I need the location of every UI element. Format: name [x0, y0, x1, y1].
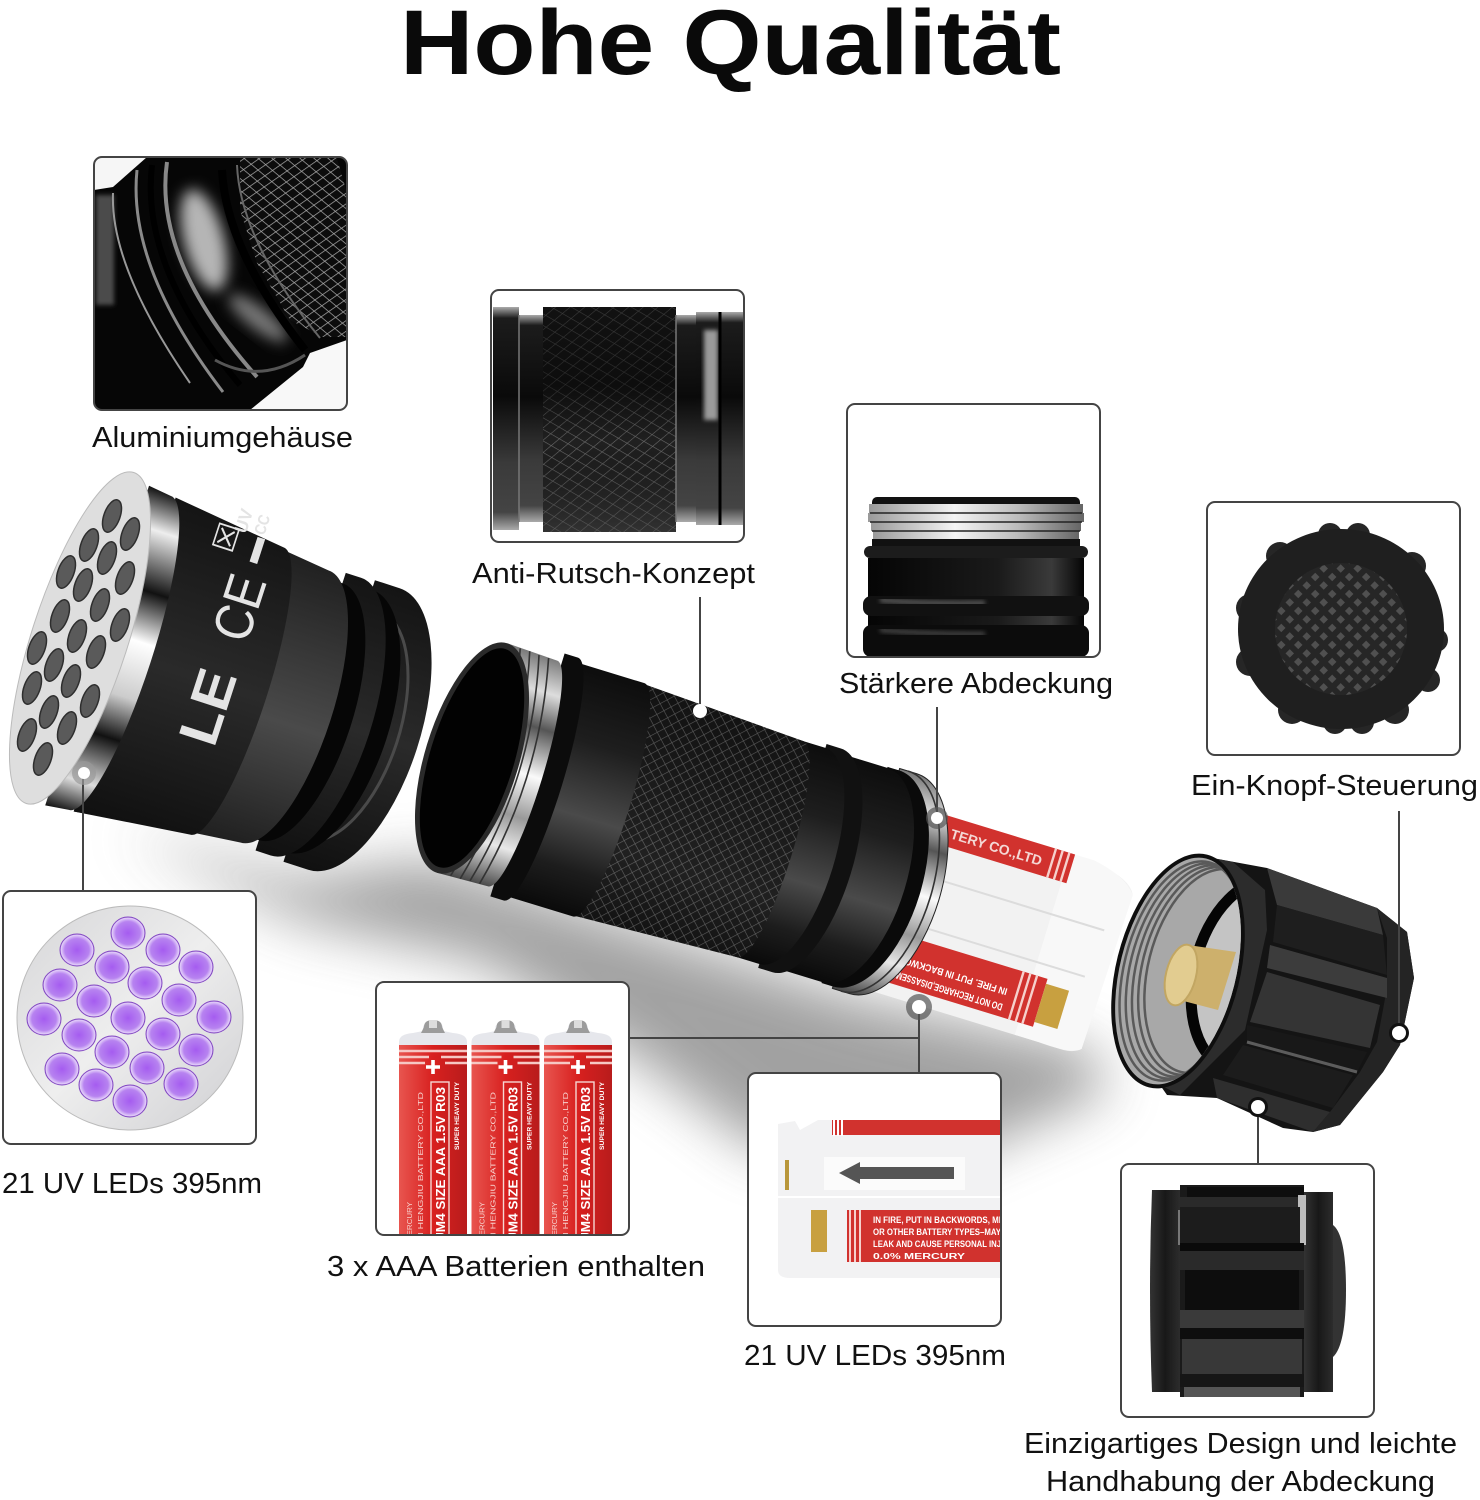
- panel: unique cap design: [1121, 1164, 1374, 1417]
- flashlight: tail cap: [1111, 854, 1414, 1132]
- head markings: ☒: [207, 518, 248, 557]
- connector lines: [83, 597, 1399, 1164]
- label: Anti-Rutsch-Konzept: Anti-Rutsch-Konzept: [472, 558, 755, 590]
- flashlight: battery holder: [847, 802, 1139, 1056]
- panel: AAA batteries: [376, 982, 629, 1245]
- label: 21 UV LEDs centre: 21 UV LEDs 395nm: [744, 1340, 1006, 1372]
- label: Stärkere Abdeckung: Stärkere Abdeckung: [839, 668, 1113, 700]
- flashlight shadow: [120, 830, 1110, 1170]
- label: unique design: Handhabung der Abdeckung: [1046, 1466, 1435, 1498]
- head markings: UV: [231, 506, 257, 535]
- red battery bottom: [856, 925, 1071, 1034]
- panel: anti-slip knurl: [491, 290, 744, 542]
- head markings: [148, 501, 299, 752]
- panel: one-button control: [1207, 502, 1460, 755]
- cap interior threads: [1115, 858, 1241, 1084]
- head markings: CE: [201, 567, 279, 648]
- red battery bottom: IN FIRE. PUT IN BACKWORDS: [886, 949, 1009, 996]
- panel: stronger cover: [847, 404, 1100, 658]
- cap silhouette: [1160, 857, 1414, 1132]
- head silver ring: [45, 486, 202, 823]
- panel: battery holder: [748, 1073, 1001, 1326]
- panel: aluminium housing: [94, 157, 347, 410]
- panel: battery holder: IN FIRE, PUT IN BACKWORDS, MI: [873, 1215, 1001, 1225]
- head markings: CC: [252, 512, 274, 537]
- LED face: [0, 458, 179, 818]
- red battery top: [899, 803, 1075, 883]
- label: 21 UV LEDs left: 21 UV LEDs 395nm: [2, 1168, 262, 1200]
- label: unique design: Einzigartiges Design und leichte: [1024, 1428, 1457, 1460]
- flashlight: middle body: [390, 623, 976, 1022]
- LED array: [27, 917, 231, 1117]
- panel: 21 UV LEDs: [3, 891, 256, 1144]
- arrow: [839, 1162, 954, 1184]
- flashlight: head: [45, 478, 471, 909]
- marker dots: [72, 704, 1409, 1117]
- label: Ein-Knopf-Steuerung: Ein-Knopf-Steuerung: [1191, 770, 1478, 802]
- red battery bottom: DO NOT RECHARGE,DISASSEMBLE: [881, 965, 1004, 1012]
- label: unique design: [1024, 1428, 1457, 1498]
- cap rim band: [1160, 857, 1267, 1095]
- head markings: LE: [166, 661, 249, 752]
- panel: battery holder: OR OTHER BATTERY TYPES–MAY: [873, 1227, 1001, 1237]
- label: Aluminiumgehäuse: Aluminiumgehäuse: [92, 422, 353, 454]
- panel: battery holder: LEAK AND CAUSE PERSONAL INJ: [873, 1239, 1001, 1249]
- label: 3 x AAA: 3 x AAA Batterien enthalten: [327, 1251, 705, 1283]
- brass contact: [1159, 941, 1236, 1010]
- panel: battery holder: 0.0% MERCURY: [873, 1252, 966, 1261]
- red battery top: TERY CO.,LTD: [949, 826, 1044, 869]
